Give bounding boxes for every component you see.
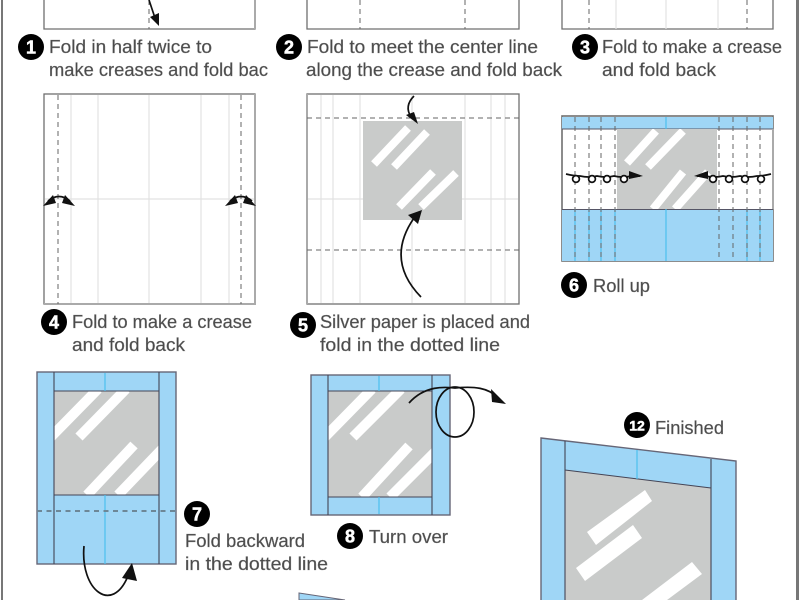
arrow: top fold down — [406, 96, 418, 124]
silver paper — [54, 392, 158, 494]
step 4 caption — [41, 309, 252, 355]
step 2 caption — [276, 34, 563, 80]
panel: step 4 diagram — [43, 94, 256, 304]
arrow: left double fold — [43, 195, 75, 206]
arrow: roll up left — [566, 171, 643, 182]
step 4 caption: Fold to make a crease — [72, 311, 252, 332]
step 3 caption: Fold to make a crease — [602, 36, 782, 57]
step 4 caption: and fold back — [72, 334, 186, 355]
step 1 caption: make creases and fold bac — [49, 59, 268, 80]
step 7 caption: Fold backward — [185, 530, 305, 551]
arrow: right double fold — [225, 195, 256, 206]
arrow: roll up right — [694, 171, 771, 182]
step 7 caption: 7 — [192, 504, 202, 524]
bottom blue band — [562, 209, 773, 261]
panel: step 12 finished diagram — [541, 438, 736, 600]
step 3 caption — [572, 34, 782, 80]
step 8 caption: Turn over — [369, 526, 448, 547]
step 4 caption: 4 — [49, 312, 59, 332]
step 7 caption: in the dotted line — [185, 553, 328, 574]
silver paper — [565, 470, 711, 600]
silver paper — [328, 392, 432, 496]
panel: step 2 diagram — [307, 0, 519, 29]
step 3 caption: and fold back — [602, 59, 717, 80]
step 5 caption — [290, 311, 530, 355]
step 5 caption: 5 — [298, 316, 308, 336]
arrow: turn over — [409, 387, 506, 437]
step 8 caption: 8 — [345, 526, 355, 546]
page border right — [796, 0, 799, 600]
step 2 caption: 2 — [284, 38, 294, 58]
step 1 caption: Fold in half twice to — [49, 36, 212, 57]
panel: step 3 diagram — [562, 0, 773, 29]
step 6 caption: 6 — [569, 276, 579, 296]
step 12 caption: Finished — [655, 417, 724, 438]
panel: step 1 diagram — [44, 0, 255, 29]
step 5 caption: fold in the dotted line — [320, 334, 500, 355]
silver paper — [617, 129, 717, 209]
panel: step 5 diagram — [307, 94, 519, 304]
arrow: bottom fold up — [401, 210, 422, 297]
arrow: fold backward — [84, 546, 137, 595]
step 8 caption — [337, 523, 448, 549]
panel: step 6 diagram — [562, 116, 773, 261]
step 1 caption: 1 — [26, 38, 36, 58]
arrow: step 1 fold — [149, 0, 159, 26]
silver paper — [363, 121, 462, 220]
step 1 caption — [18, 34, 268, 80]
step 6 caption — [561, 272, 650, 298]
step 2 caption: along the crease and fold back — [306, 59, 563, 80]
step 12 caption — [624, 412, 724, 438]
step 6 caption: Roll up — [593, 275, 650, 296]
panel: step 8 diagram — [311, 375, 506, 515]
top blue band — [562, 117, 773, 129]
step 7 caption — [184, 501, 328, 574]
page border left — [1, 0, 3, 600]
step 3 caption: 3 — [580, 38, 590, 58]
panel: next step diagram fragment — [299, 593, 345, 600]
step 5 caption: Silver paper is placed and — [320, 311, 530, 332]
panel: step 7 diagram — [37, 372, 176, 595]
step 12 caption: 12 — [629, 418, 645, 434]
step 2 caption: Fold to meet the center line — [307, 36, 538, 57]
